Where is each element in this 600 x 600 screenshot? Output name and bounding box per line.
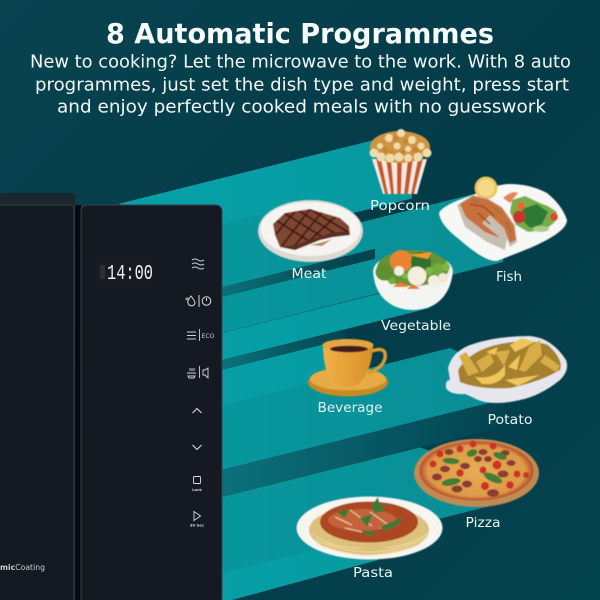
- potato: [446, 336, 567, 403]
- pasta: [296, 496, 442, 560]
- microwave top edge: [0, 193, 75, 206]
- label: vegetable: Vegetable: [381, 318, 451, 334]
- label: pasta: Pasta: [353, 565, 393, 581]
- icon: menu and eco: ECO: [202, 333, 215, 340]
- label: fish: Fish: [496, 269, 522, 285]
- label: beverage: Beverage: [318, 400, 382, 416]
- coating label: micCoating: [0, 563, 45, 572]
- control panel: [81, 205, 222, 600]
- intro text: New to cooking? Let the microwave to the work. With 8 auto: [30, 52, 571, 72]
- clock display: 14:00: [107, 263, 153, 286]
- light beams: [120, 140, 505, 600]
- icon: microwave waves: [192, 259, 204, 269]
- icon: start and 30 sec: [190, 512, 204, 528]
- meat: [258, 200, 363, 262]
- lemon: [474, 176, 498, 200]
- icon: start and 30 sec: 30 Sec: [190, 522, 204, 528]
- icon: stop and lock: [192, 476, 202, 492]
- icon: menu and eco: [187, 329, 215, 341]
- salad: [510, 196, 557, 232]
- pizza: [414, 439, 539, 507]
- icon: arrow down: [192, 445, 202, 450]
- gap between door and panel: [75, 205, 81, 600]
- icon: arrow up: [192, 408, 202, 413]
- microwave door: [0, 205, 74, 600]
- title: 8 Automatic Programmes: [106, 17, 494, 50]
- salmon steak: [457, 195, 517, 250]
- intro text: [30, 52, 571, 118]
- icon: defrost and timer: [185, 295, 211, 307]
- icon: steam and mute: [187, 366, 208, 378]
- icon: defrost and timer: *: [185, 296, 189, 305]
- label: popcorn: Popcorn: [370, 198, 430, 214]
- intro text: and enjoy perfectly cooked meals with no guesswork: [57, 98, 547, 118]
- icon: stop and lock: Lock: [192, 487, 202, 492]
- label: potato: Potato: [488, 412, 532, 428]
- label: meat: Meat: [292, 266, 326, 282]
- intro text: programmes, just set the dish type and weight, press start: [35, 76, 569, 96]
- popcorn: [370, 129, 432, 194]
- vegetable: [373, 250, 453, 310]
- fish: [439, 176, 567, 261]
- clock display: [96, 258, 156, 286]
- microwave: [0, 193, 222, 600]
- beverage: [308, 339, 388, 396]
- label: pizza: Pizza: [466, 515, 500, 531]
